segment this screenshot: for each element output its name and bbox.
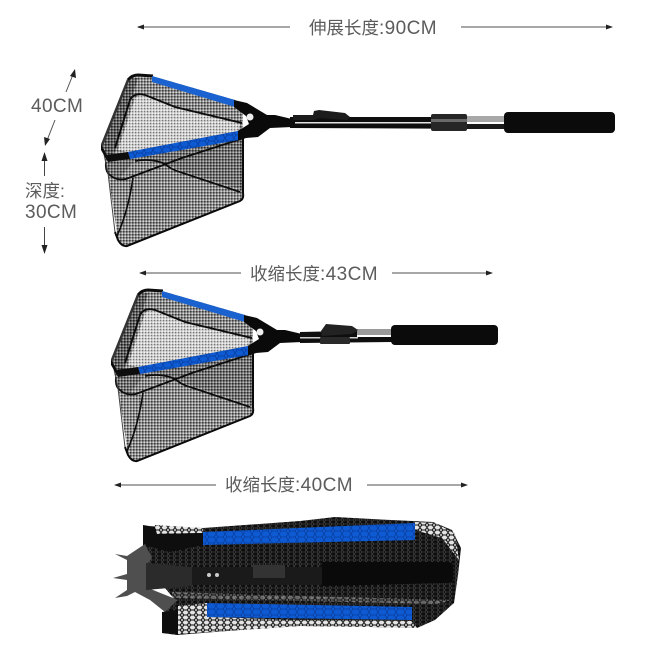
collapsed landing net xyxy=(111,290,498,461)
folded landing net xyxy=(113,517,461,635)
shaft xyxy=(300,330,392,343)
reel clip xyxy=(293,110,350,120)
dimension: extended length 90CM: 伸展长度:90CM xyxy=(309,18,437,39)
dimension: depth 30CM: 深度: xyxy=(25,181,65,201)
net head xyxy=(101,75,292,246)
dimension: width 40CM: 40CM xyxy=(31,96,83,117)
reel clip xyxy=(321,324,358,336)
foam grip xyxy=(391,325,498,345)
dimension: folded length 40CM xyxy=(114,475,468,496)
telescopic shaft xyxy=(290,117,505,129)
light mesh highlights xyxy=(155,522,459,634)
dimension: width 40CM xyxy=(31,69,83,146)
strap xyxy=(322,562,453,586)
extended landing net xyxy=(101,75,615,246)
telescopic shaft xyxy=(192,567,322,585)
net head xyxy=(111,290,302,461)
foam grip xyxy=(504,112,615,133)
mesh bag xyxy=(143,517,461,635)
dimension: depth 30CM: 30CM xyxy=(25,202,77,223)
plastic hinge xyxy=(113,544,192,612)
upper blue sleeve xyxy=(203,523,415,545)
dimension: folded length 40CM: 收缩长度:40CM xyxy=(225,475,353,496)
dimension: collapsed length 43CM xyxy=(139,264,493,285)
faint mesh strip xyxy=(172,592,452,604)
lower blue sleeve xyxy=(207,603,412,620)
dimension: depth 30CM xyxy=(25,152,77,254)
black arm ends xyxy=(143,525,203,634)
dimension: collapsed length 43CM: 收缩长度:43CM xyxy=(250,264,378,285)
collar xyxy=(431,114,467,131)
dimension: extended length 90CM xyxy=(137,18,613,39)
